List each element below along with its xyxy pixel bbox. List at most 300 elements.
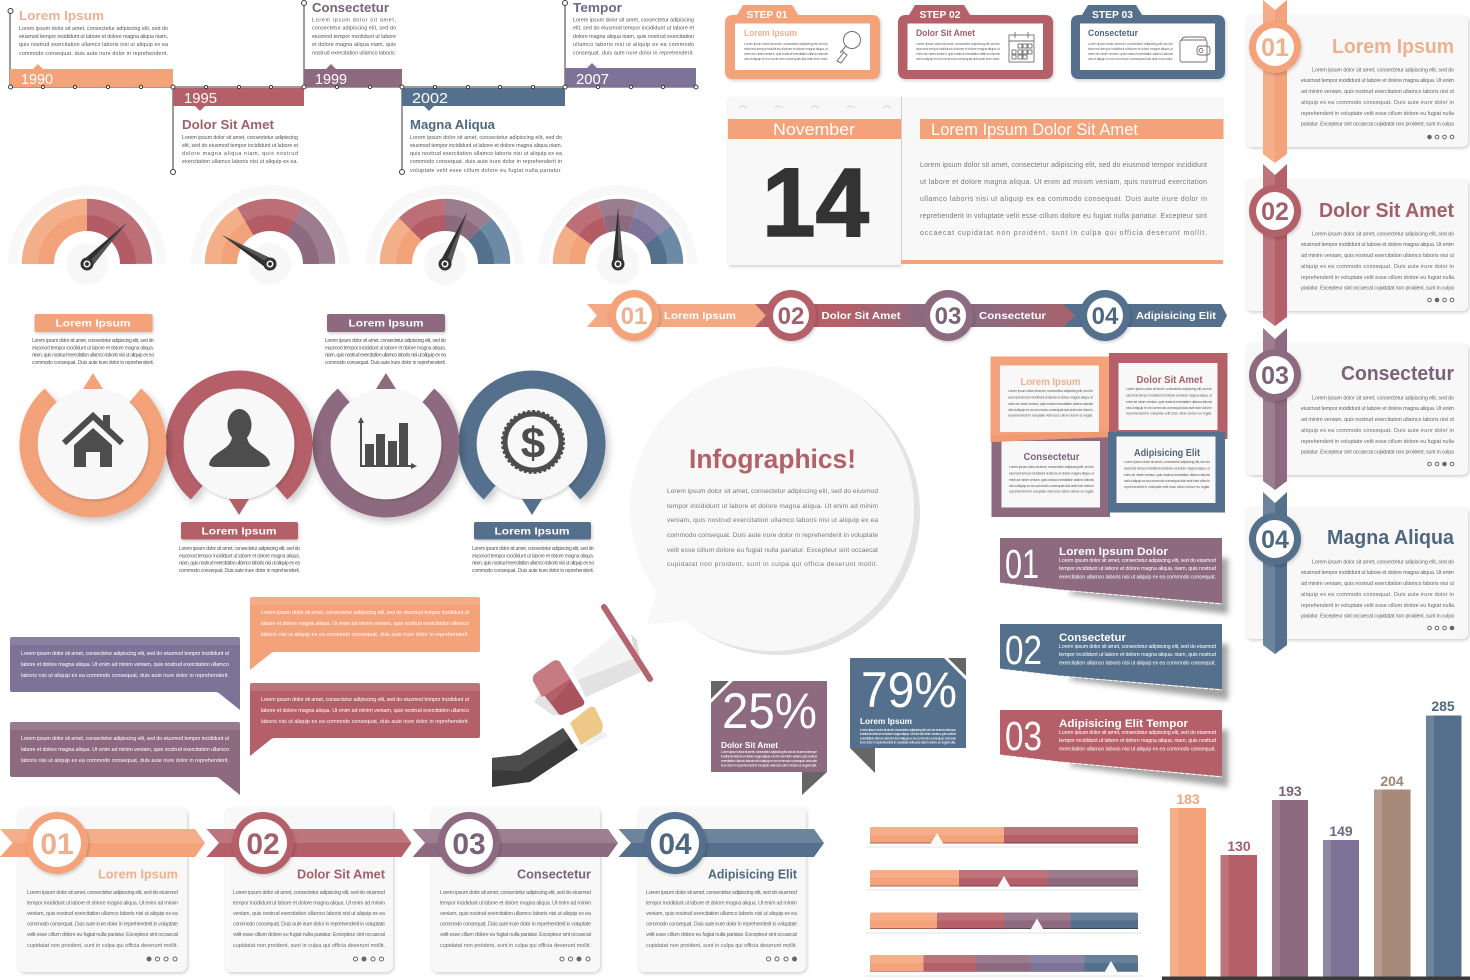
grid box: orange: Lorem ipsum dolor sit amet, consectetur adipiscing elit, sed do xyxy=(1008,389,1093,393)
timeline text: Magna Aliqua: voluptate velit esse cillum dolore eu fugiat nulla pariatur. xyxy=(410,168,562,174)
torn ribbon 02: 02 xyxy=(1005,627,1042,673)
grid box: blue: enim ad minim veniam, quis nostrud exercitation ullamco laboris xyxy=(1124,473,1210,477)
speech box: red: laboris nisi ut aliquip ex ea commodo consequat, duis aute irure dolor in reprehenderit. xyxy=(261,719,469,725)
bottom card 04: commodo consequat. Duis aute irure dolor in reprehenderit in voluptate xyxy=(646,922,797,928)
timeline text: Consectetur: eiusmod tempor incididunt ut labore xyxy=(312,34,396,40)
step labels: Lorem Ipsum xyxy=(664,310,736,322)
vertical card 01: Lorem Ipsum xyxy=(1332,36,1454,58)
speech box: orange: labore et dolore magna aliqua. Ut enim ad minim veniam, quis nostrud exercitation ullamco xyxy=(261,621,469,627)
stat box 25% xyxy=(711,681,827,795)
page dots xyxy=(1428,298,1454,302)
bottom card 01: veniam, quis nostrud exercitation ullamco laboris nisi ut aliquip ex ea xyxy=(27,911,178,917)
gauge 1 xyxy=(13,190,161,285)
stat box 79%: 79% xyxy=(861,662,957,718)
bottom card 04: tempor incididunt ut labore et dolore magna aliqua. Ut enim ad minim xyxy=(646,900,798,906)
icon: dollar coin: $ xyxy=(521,419,545,468)
chart axis xyxy=(1162,976,1470,980)
timeline text: Consectetur: Lorem ipsum dolor sit amet, xyxy=(312,18,396,24)
vertical card 04: 04 xyxy=(1261,526,1289,554)
page dots xyxy=(560,957,590,961)
bottom card 03: commodo consequat. Duis aute irure dolor in reprehenderit in voluptate xyxy=(440,922,591,928)
step card 02: eiusmod tempor incididunt ut labore et dolore magna aliqua. ut xyxy=(916,47,1001,51)
label block: blue: Lorem ipsum dolor sit amet, consectetur adipiscing elit, sed do xyxy=(472,546,594,552)
speech box: red: labore et dolore magna aliqua. Ut enim ad minim veniam, quis nostrud exercitation ullamco xyxy=(261,708,469,714)
speech bubble: commodo consequat. Duis aute irure dolor in reprehenderit in voluptate xyxy=(667,532,878,539)
label block: orange: Lorem Ipsum xyxy=(56,318,130,330)
label block: orange: eiusmod tempor incididunt ut labore et dolore magna aliqua. xyxy=(32,346,154,352)
vertical card 02: eiusmod tempor incididunt ut labore et dolore magna aliqua. Ut enim xyxy=(1301,242,1454,248)
step card 03: nisi ut aliquip ex ea commodo consequat duis aute irure dolor. xyxy=(1088,57,1173,61)
step circle 01 xyxy=(608,290,660,341)
gauge 4 xyxy=(544,190,692,285)
bottom card 03 xyxy=(412,807,618,972)
torn ribbon 03: exercitation ullamco laboris nisi ut aliquip ex ea commodo consequat. xyxy=(1059,746,1216,752)
grid box: red: Lorem ipsum dolor sit amet, consectetur adipiscing elit, sed do xyxy=(1126,387,1212,391)
timeline text: Magna Aliqua: commodo consequat. duis aute irure dolor in reprehenderit in xyxy=(410,159,562,165)
speech box: plum: Lorem ipsum dolor sit amet, consectetur adipiscing elit, sed do eiusmod tempor incididunt ut xyxy=(21,736,229,742)
timeline bar 2007 xyxy=(565,63,696,88)
timeline text: Consectetur: nostrud exercitation ullamco laboris. xyxy=(312,50,396,56)
step card 03: STEP 03 xyxy=(1092,9,1133,21)
label block: plum: eiusmod tempor incididunt ut labore et dolore magna aliqua. xyxy=(325,346,446,352)
speech box: orange: Lorem ipsum dolor sit amet, consectetur adipiscing elit, sed do eiusmod tempor incididunt ut xyxy=(261,610,470,616)
bottom card 03: veniam, quis nostrud exercitation ullamco laboris nisi ut aliquip ex ea xyxy=(440,911,591,917)
vertical card 03: ad minim veniam, quis nostrud exercitation ullamco laboris nisi ut xyxy=(1301,417,1454,423)
bottom card 02: velit esse cillum dolore eu fugiat nulla pariatur. Excepteur sint occaecat xyxy=(233,932,386,938)
megaphone rim xyxy=(604,607,650,679)
vertical card 02: 02 xyxy=(1261,198,1289,226)
label block: red: commodo consequat. Duis aute irure dolor in reprehenderit. xyxy=(179,568,300,574)
grid box: plum: Consectetur xyxy=(1024,452,1080,463)
step circle 03 xyxy=(922,290,974,341)
stat box 79%: Lorem Ipsum xyxy=(860,716,912,726)
bottom card 04: cupidatat non proident, sunt in culpa qui officia deserunt mollit. xyxy=(646,943,797,949)
timeline text: Lorem Ipsum: Lorem Ipsum xyxy=(19,8,104,23)
vertical card 04: pariatur. Excepteur sint occaecat cupidatat non proident, sunt in culpa xyxy=(1301,614,1454,620)
stat box 79%: irure dolor in reprehenderit in voluptate velit esse cillum dolore eu fugiat nulla. xyxy=(860,740,956,744)
bar 204: 204 xyxy=(1380,773,1404,789)
bottom card 01: velit esse cillum dolore eu fugiat nulla pariatur. Excepteur sint occaecat xyxy=(27,932,179,938)
bottom card 01: Lorem Ipsum xyxy=(98,866,178,882)
bottom card 03: 03 xyxy=(452,828,486,861)
grid box: blue: nisi ut aliquip ex ea commodo consequat duis aute irure dolor in xyxy=(1124,479,1210,483)
timeline text: Tempor: Lorem ipsum dolor sit amet, consectetur adipiscing xyxy=(573,18,694,24)
label block: plum: niam, quis nostrud exercitation ullamco laboris nisi ut aliquip ex ea xyxy=(325,352,446,358)
bottom card 01: Lorem ipsum dolor sit amet, consectetur adipiscing elit, sed do eiusmod xyxy=(27,890,178,896)
arm xyxy=(492,728,578,787)
gauge 2 xyxy=(196,190,344,285)
progress bar 1 xyxy=(866,827,1142,848)
bar 204 xyxy=(1374,773,1410,977)
bottom card 04: Lorem ipsum dolor sit amet, consectetur adipiscing elit, sed do eiusmod xyxy=(646,890,797,896)
speech box: red: Lorem ipsum dolor sit amet, consectetur adipiscing elit, sed do eiusmod tempor incididunt ut xyxy=(261,697,470,703)
bar 130 xyxy=(1220,838,1257,977)
progress bar 2 xyxy=(866,870,1142,891)
torn ribbon 03: tempor incididunt ut labore et dolore magna aliqua. niam, quis nostrud xyxy=(1059,738,1216,744)
speech box: red xyxy=(250,683,480,756)
speech box: purple xyxy=(10,637,240,710)
stat box 25%: exercitation ullamco laboris nisi ut aliquip ex ea commodo consequat. duis aute xyxy=(721,759,817,763)
vertical card 03: Consectetur xyxy=(1341,363,1454,385)
vertical card 01: pariatur. Excepteur sint occaecat cupidatat non proident, sunt in culpa xyxy=(1301,122,1454,128)
calendar text panel xyxy=(901,97,1224,264)
stat box 25%: Dolor Sit Amet xyxy=(721,740,778,750)
bottom card 02: 02 xyxy=(246,828,280,861)
gauge 3 xyxy=(371,190,519,285)
step card 02 xyxy=(898,5,1053,79)
label block: red: niam, quis nostrud exercitation ullamco laboris nisi ut aliquip ex ea xyxy=(179,560,300,566)
step card 03: enim ad minim veniam, quis nostrud exercitation ullamco laboris xyxy=(1088,52,1173,56)
grid box: orange: Lorem Ipsum xyxy=(1020,377,1081,388)
timeline text: Tempor: elit, sed do eiusmod tempor incididunt ut labore et xyxy=(573,26,694,32)
timeline text: Lorem Ipsum: Lorem ipsum dolor sit amet, consectetur adipiscing elit, sed do xyxy=(19,26,168,32)
vertical card 04: eiusmod tempor incididunt ut labore et dolore magna aliqua. Ut enim xyxy=(1301,570,1454,576)
bar 183: 183 xyxy=(1176,791,1200,807)
timeline text: Magna Aliqua xyxy=(410,117,562,174)
step circle 04: 04 xyxy=(1092,303,1119,330)
label block: plum: Lorem Ipsum xyxy=(348,318,424,330)
label block: blue: niam, quis nostrud exercitation ullamco laboris nisi ut aliquip ex ea xyxy=(472,560,594,566)
torn ribbon 01: 01 xyxy=(1005,541,1039,587)
bottom card 02: commodo consequat. Duis aute irure dolor in reprehenderit in voluptate xyxy=(233,922,385,928)
grid box: red: eiusmod tempor incididunt ut labore et dolore magna aliqua. ut xyxy=(1126,394,1212,398)
torn ribbon 02: exercitation ullamco laboris nisi ut aliquip ex ea commodo consequat. xyxy=(1059,660,1216,666)
step card 02: enim ad minim veniam, quis nostrud exercitation ullamco laboris xyxy=(916,52,1000,56)
vertical card 04: aliquip ex ea commodo consequat. Duis aute irure dolor in xyxy=(1301,592,1454,598)
bottom card 01: tempor incididunt ut labore et dolore magna aliqua. Ut enim ad minim xyxy=(27,900,179,906)
stat box 25%: irure dolor in reprehenderit in voluptate velit esse cillum dolore eu fugiat nulla. xyxy=(721,764,817,768)
speech bubble: velit esse cillum dolore eu fugiat nulla pariatur. Excepteur sint occaecat xyxy=(667,547,878,554)
grid box: plum xyxy=(992,436,1110,517)
timeline bar 2002: 2002 xyxy=(412,90,448,107)
progress bar 3 xyxy=(866,912,1142,934)
stat box 79% xyxy=(850,658,966,773)
timeline text: Dolor Sit Amet: exercitation ullamco laboris nisi ut aliquip ex ea. xyxy=(182,159,298,165)
vertical card 01: ad minim veniam, quis nostrud exercitation ullamco laboris nisi ut xyxy=(1301,89,1454,95)
vertical card 02 xyxy=(1246,164,1468,326)
bottom card 03: cupidatat non proident, sunt in culpa qui officia deserunt mollit. xyxy=(440,943,591,949)
timeline text: Dolor Sit Amet: Lorem ipsum dolor sit amet, consectetur adipiscing xyxy=(182,135,298,141)
vertical card 02: pariatur. Excepteur sint occaecat cupidatat non proident, sunt in culpa xyxy=(1301,286,1454,292)
bottom card 04: 04 xyxy=(658,828,692,861)
label block: blue: Lorem Ipsum xyxy=(494,526,570,538)
vertical card 04: Magna Aliqua xyxy=(1327,527,1455,549)
step card 01: STEP 01 xyxy=(746,9,788,21)
torn ribbon 01: tempor incididunt ut labore et dolore magna aliqua. niam, quis nostrud xyxy=(1059,566,1216,572)
speech box: purple: laboris nisi ut aliquip ex ea commodo consequat, duis aute irure dolor in reprehenderit. xyxy=(21,673,229,679)
grid box: blue: reprehenderit in voluptate velit esse cillum dolore eu fugiat. xyxy=(1124,485,1210,489)
step card 01: Lorem ipsum dolor sit amet, consectetur adipiscing elit, sed do xyxy=(744,42,828,46)
bottom card 04: velit esse cillum dolore eu fugiat nulla pariatur. Excepteur sint occaecat xyxy=(646,932,798,938)
bottom card 03: velit esse cillum dolore eu fugiat nulla pariatur. Excepteur sint occaecat xyxy=(440,932,592,938)
page dots xyxy=(766,957,796,961)
torn ribbon 01 xyxy=(1000,538,1228,614)
megaphone cone xyxy=(572,632,641,697)
step card 01: nisi ut aliquip ex ea commodo consequat duis aute irure dolor. xyxy=(744,57,828,61)
label block: plum: Lorem ipsum dolor sit amet, consectetur adipiscing elit, sed do xyxy=(325,338,446,344)
torn ribbon 02: tempor incididunt ut labore et dolore magna aliqua. niam, quis nostrud xyxy=(1059,652,1216,658)
timeline text: Tempor: consequat. duis aute irure dolor in reprehenderit. xyxy=(573,50,694,56)
label block: orange: commodo consequat. Duis aute irure dolor in reprehenderit. xyxy=(32,360,154,366)
step labels: Dolor Sit Amet xyxy=(822,310,901,322)
grid box: red: enim ad minim veniam, quis nostrud exercitation ullamco laboris xyxy=(1126,400,1212,404)
timeline text: Dolor Sit Amet: Dolor Sit Amet xyxy=(182,117,275,132)
four box grid xyxy=(990,353,1228,517)
vertical card 01: aliquip ex ea commodo consequat. Duis aute irure dolor in xyxy=(1301,100,1454,106)
grid box: plum: enim ad minim veniam, quis nostrud exercitation ullamco laboris xyxy=(1009,478,1094,482)
timeline text: Lorem Ipsum: eiusmod tempor incididunt ut labore et dolore magna aliqua niam, xyxy=(19,34,168,40)
speech box: orange: laboris nisi ut aliquip ex ea commodo consequat, duis aute irure dolor in reprehenderit. xyxy=(261,632,469,638)
step card 02: nisi ut aliquip ex ea commodo consequat duis aute irure dolor. xyxy=(916,57,1000,61)
bottom card 04: veniam, quis nostrud exercitation ullamco laboris nisi ut aliquip ex ea xyxy=(646,911,797,917)
timeline text: Tempor xyxy=(573,0,694,56)
step labels xyxy=(664,310,1217,322)
step card 03: Consectetur xyxy=(1088,28,1138,38)
torn ribbon 03: Lorem ipsum dolor sit amet, consectetur adipiscing elit, sed do eiusmod xyxy=(1059,730,1216,736)
torn ribbon 01: Lorem ipsum dolor sit amet, consectetur adipiscing elit, sed do eiusmod xyxy=(1059,558,1216,564)
step circle 01: 01 xyxy=(621,303,647,330)
calendar text panel: Lorem ipsum dolor sit amet, consectetur adipiscing elit, sed do eiusmod tempor incididunt xyxy=(920,162,1207,169)
grid box: red: reprehenderit in voluptate velit esse cillum dolore eu fugiat. xyxy=(1126,412,1212,416)
icon: house xyxy=(64,415,122,467)
bottom card 04: Adipisicing Elit xyxy=(708,866,798,882)
torn ribbon 01: exercitation ullamco laboris nisi ut aliquip ex ea commodo consequat. xyxy=(1059,574,1216,580)
calendar text panel: ullamco laboris nisi ut aliquip ex ea commodo consequat. Duis aute irure dolor in xyxy=(920,196,1207,203)
bar 183 xyxy=(1170,791,1206,977)
speech box: plum xyxy=(10,722,240,795)
icon: wallet xyxy=(1180,37,1210,62)
vertical card 04: ad minim veniam, quis nostrud exercitation ullamco laboris nisi ut xyxy=(1301,581,1454,587)
timeline text: Magna Aliqua: Magna Aliqua xyxy=(410,117,496,132)
speech bubble xyxy=(630,367,920,655)
circle process 3 ring xyxy=(322,373,451,508)
label block: orange xyxy=(32,314,154,366)
step circle 02 xyxy=(766,290,816,341)
speech bubble: tempor incididunt ut labore et dolore magna aliqua. Ut enim ad minim xyxy=(667,503,878,510)
calendar panel: 14 xyxy=(762,148,869,257)
timeline text: Dolor Sit Amet xyxy=(182,117,298,165)
icon: megaphone with hand xyxy=(492,607,650,787)
stat box 79%: Lorem ipsum dolor sit amet, consectetur adipiscing elit, sed do eiusmod tempor xyxy=(860,728,957,732)
calendar text panel: ut labore et dolore magna aliqua. Ut enim ad minim veniam, quis nostrud exercitation xyxy=(920,179,1207,186)
step card 03 xyxy=(1071,5,1225,79)
grid box: plum: eiusmod tempor incididunt ut labore et dolore magna aliqua. ut xyxy=(1009,472,1094,476)
bar 149: 149 xyxy=(1329,823,1353,839)
label block: red: Lorem ipsum dolor sit amet, consectetur adipiscing elit, sed do xyxy=(179,546,300,552)
bar 130: 130 xyxy=(1227,838,1251,854)
timeline text: Magna Aliqua: Lorem ipsum dolor sit amet, consectetur adipiscing elit, sed do xyxy=(410,135,562,141)
torn ribbon 02 xyxy=(1000,624,1228,700)
calendar panel xyxy=(728,97,901,265)
timeline bar 1999: 1999 xyxy=(315,71,347,88)
timeline bar 2007: 2007 xyxy=(576,71,609,88)
bottom card 04 xyxy=(618,807,824,972)
torn ribbon 03: 03 xyxy=(1005,713,1042,759)
grid box: orange: enim ad minim veniam, quis nostrud exercitation ullamco laboris xyxy=(1008,402,1093,406)
page dots xyxy=(1428,462,1454,466)
grid box: blue: Lorem ipsum dolor sit amet, consectetur adipiscing elit, sed do xyxy=(1124,460,1210,464)
vertical card 01: 01 xyxy=(1261,34,1289,62)
calendar panel: November xyxy=(773,120,855,139)
grid box: plum: nisi ut aliquip ex ea commodo consequat duis aute irure dolor in xyxy=(1009,484,1094,488)
label block: blue: eiusmod tempor incididunt ut labore et dolore magna aliqua. xyxy=(472,554,594,560)
bottom card 02: tempor incididunt ut labore et dolore magna aliqua. Ut enim ad minim xyxy=(233,900,386,906)
timeline text: Magna Aliqua: quis nostrud exercitation ullamco laboris nisi ut aliquip ex ea xyxy=(410,151,562,157)
stat box 25%: incididunt ut labore et dolore magna aliqua. Ut enim ad minim veniam, quis nostrud xyxy=(721,754,817,758)
vertical card 03: Lorem ipsum dolor sit amet, consectetur adipiscing elit, sed do xyxy=(1312,396,1454,402)
timeline text: Consectetur: Consectetur xyxy=(312,0,389,15)
icon: bar chart xyxy=(358,417,417,469)
vertical card 02: Lorem ipsum dolor sit amet, consectetur adipiscing elit, sed do xyxy=(1312,232,1454,238)
grid box: plum: Lorem ipsum dolor sit amet, consectetur adipiscing elit, sed do xyxy=(1009,465,1094,469)
step card 01: Lorem Ipsum xyxy=(744,28,797,38)
vertical card 03: reprehenderit in voluptate velit esse cillum dolore eu fugiat nulla xyxy=(1301,439,1454,445)
bottom card 02: veniam, quis nostrud exercitation ullamco laboris nisi ut aliquip ex ea xyxy=(233,911,385,917)
vertical card 02: aliquip ex ea commodo consequat. Duis aute irure dolor in xyxy=(1301,264,1454,270)
label block: orange: niam, quis nostrud exercitation ullamco laboris nisi ut aliquip ex ea xyxy=(32,352,154,358)
timeline text: Lorem Ipsum: commodo consequat. duis aute irure dolor in reprehenderit. xyxy=(19,51,168,57)
step labels: Consectetur xyxy=(979,310,1046,322)
timeline xyxy=(8,0,698,174)
timeline bar 1990 xyxy=(10,64,173,88)
timeline text: Dolor Sit Amet: dolore magna aliqua niam, quis nostrud xyxy=(182,151,298,157)
torn ribbon 02: Lorem ipsum dolor sit amet, consectetur adipiscing elit, sed do eiusmod xyxy=(1059,644,1216,650)
timeline text: Tempor: Tempor xyxy=(573,0,622,15)
bar 285 xyxy=(1426,698,1462,977)
bottom card 02: Dolor Sit Amet xyxy=(297,866,386,882)
timeline bar 1995 xyxy=(173,88,304,111)
step circle 02: 02 xyxy=(778,303,804,330)
timeline text: Lorem Ipsum: quis nostrud exercitation ullamco laboris nisi ut aliquip ex ea xyxy=(19,42,168,48)
calendar text panel: occaecat cupidatat non proident, sunt in culpa qui officia deserunt mollit. xyxy=(920,230,1207,237)
grid box: red: Dolor Sit Amet xyxy=(1136,375,1203,386)
label block: red xyxy=(179,522,300,574)
label block: plum: commodo consequat. Duis aute irure dolor in reprehenderit. xyxy=(325,360,446,366)
speech bubble: Lorem ipsum dolor sit amet, consectetur adipiscing elit, sed do eiusmod xyxy=(667,488,878,495)
page dots xyxy=(1428,135,1454,139)
timeline text: Tempor: dolore magna aliqua niam, quis nostrud exercitation xyxy=(573,34,694,40)
torn ribbon 03: Adipisicing Elit Tempor xyxy=(1059,718,1189,730)
grid box: orange xyxy=(990,356,1109,442)
grid box: orange: reprehenderit in voluptate velit esse cillum dolore eu fugiat. xyxy=(1008,414,1093,418)
torn ribbon 02: Consectetur xyxy=(1059,632,1127,644)
timeline nodes xyxy=(8,0,698,174)
bar 193 xyxy=(1272,783,1308,977)
bottom card 01: cupidatat non proident, sunt in culpa qui officia deserunt mollit. xyxy=(27,943,178,949)
vertical card 02: reprehenderit in voluptate velit esse cillum dolore eu fugiat nulla xyxy=(1301,275,1454,281)
speech bubble: veniam, quis nostrud exercitation ullamco laboris nisi ut aliquip ex ea xyxy=(667,517,878,524)
stat box 79%: exercitation ullamco laboris nisi ut aliquip ex ea commodo consequat. duis aute xyxy=(860,736,956,740)
step labels: Adipisicing Elit xyxy=(1136,310,1217,322)
bar 149 xyxy=(1323,823,1359,977)
vertical card 02: ad minim veniam, quis nostrud exercitation ullamco laboris nisi ut xyxy=(1301,253,1454,259)
bottom card 03: tempor incididunt ut labore et dolore magna aliqua. Ut enim ad minim xyxy=(440,900,592,906)
grid box: blue: Adipisicing Elit xyxy=(1134,448,1201,459)
stat box 25%: 25% xyxy=(722,683,817,739)
speech bubble: Infographics! xyxy=(689,444,856,474)
icon: person xyxy=(209,409,270,467)
label block: plum xyxy=(325,314,446,366)
bottom card 02: cupidatat non proident, sunt in culpa qui officia deserunt mollit. xyxy=(233,943,385,949)
grid box: red: nisi ut aliquip ex ea commodo consequat duis aute irure dolor in xyxy=(1126,406,1212,410)
stat box 79%: incididunt ut labore et dolore magna aliqua. Ut enim ad minim veniam, quis nostrud xyxy=(860,732,956,736)
circle process 2 ring xyxy=(174,380,304,515)
speech box: purple: labore et dolore magna aliqua. Ut enim ad minim veniam, quis nostrud exercitation ullamco xyxy=(21,662,229,668)
bar 285: 285 xyxy=(1431,698,1455,714)
timeline bar 1990: 1990 xyxy=(21,71,53,88)
bottom card 01: 01 xyxy=(40,828,74,861)
timeline text: Consectetur xyxy=(312,0,396,56)
timeline bar 2002 xyxy=(402,88,565,111)
vertical card 04: reprehenderit in voluptate velit esse cillum dolore eu fugiat nulla xyxy=(1301,603,1454,609)
speech box: plum: laboris nisi ut aliquip ex ea commodo consequat, duis aute irure dolor in reprehenderit. xyxy=(21,758,229,764)
page dots xyxy=(1428,626,1454,630)
vertical card 03: eiusmod tempor incididunt ut labore et dolore magna aliqua. Ut enim xyxy=(1301,406,1454,412)
label block: red: Lorem Ipsum xyxy=(202,526,276,538)
step card 02: STEP 02 xyxy=(920,9,961,21)
calendar text panel: Lorem Ipsum Dolor Sit Amet xyxy=(931,120,1138,139)
grid box: blue: eiusmod tempor incididunt ut labore et dolore magna aliqua. ut xyxy=(1124,466,1210,470)
bottom card 01: commodo consequat. Duis aute irure dolor in reprehenderit in voluptate xyxy=(27,922,178,928)
vertical card 03: aliquip ex ea commodo consequat. Duis aute irure dolor in xyxy=(1301,428,1454,434)
vertical card 03: pariatur. Excepteur sint occaecat cupidatat non proident, sunt in culpa xyxy=(1301,450,1454,456)
step circle 04 xyxy=(1080,290,1130,341)
page dots xyxy=(354,957,384,961)
step card 01: enim ad minim veniam, quis nostrud exercitation ullamco laboris xyxy=(744,52,828,56)
icon: magnifier xyxy=(837,32,860,63)
step card 01 xyxy=(725,5,880,79)
bottom card 02: Lorem ipsum dolor sit amet, consectetur adipiscing elit, sed do eiusmod xyxy=(233,890,385,896)
speech box: plum: labore et dolore magna aliqua. Ut enim ad minim veniam, quis nostrud exercitation ullamco xyxy=(21,747,229,753)
timeline bar 1999 xyxy=(304,64,402,88)
torn ribbon 03 xyxy=(1000,710,1228,787)
vertical card 02: Dolor Sit Amet xyxy=(1319,200,1454,222)
timeline text: Dolor Sit Amet: elit, sed do eiusmod tempor incididunt ut labore et xyxy=(182,143,298,149)
step card 01: eiusmod tempor incididunt ut labore et dolore magna aliqua. ut xyxy=(744,47,829,51)
progress bar 4 xyxy=(866,955,1142,977)
hand xyxy=(583,706,608,747)
bottom card 01 xyxy=(0,807,205,972)
speech bubble: cupidatat non proident, sunt in culpa qui officia deserunt mollit. xyxy=(667,561,878,568)
circle process 4 ring xyxy=(468,380,596,515)
circle process 1 ring xyxy=(28,373,157,508)
icon: calendar xyxy=(1009,32,1034,62)
vertical card 01: Lorem ipsum dolor sit amet, consectetur adipiscing elit, sed do xyxy=(1312,68,1454,74)
vertical card 03: 03 xyxy=(1261,362,1289,390)
arrow process xyxy=(587,290,1227,341)
timeline bar 1995: 1995 xyxy=(184,90,217,107)
stat box 25%: Lorem ipsum dolor sit amet, consectetur adipiscing elit, sed do eiusmod tempor xyxy=(721,750,818,754)
step card 02: Dolor Sit Amet xyxy=(916,28,975,38)
grid box: orange: eiusmod tempor incididunt ut labore et dolore magna aliqua. ut xyxy=(1008,396,1093,400)
label block: blue: commodo consequat. Duis aute irure dolor in reprehenderit. xyxy=(472,568,594,574)
bottom card 03: Consectetur xyxy=(517,866,591,882)
bottom card 03: Lorem ipsum dolor sit amet, consectetur adipiscing elit, sed do eiusmod xyxy=(440,890,591,896)
grid box: red xyxy=(1109,353,1228,439)
bar 193: 193 xyxy=(1278,783,1302,799)
torn ribbon 01: Lorem Ipsum Dolor xyxy=(1059,546,1169,558)
megaphone back xyxy=(533,660,584,715)
timeline text: Consectetur: consectetur adipiscing elit, sed do xyxy=(312,26,396,32)
calendar text panel: reprehenderit in voluptate velit esse cillum dolore eu fugiat nulla pariatur. Excepteur sint xyxy=(920,213,1207,220)
timeline text: Magna Aliqua: eiusmod tempor incididunt ut labore et dolore magna aliqua niam, xyxy=(410,143,562,149)
vertical card 04 xyxy=(1246,492,1468,654)
vertical card 01: reprehenderit in voluptate velit esse cillum dolore eu fugiat nulla xyxy=(1301,111,1454,117)
vertical card 04: Lorem ipsum dolor sit amet, consectetur adipiscing elit, sed do xyxy=(1312,560,1454,566)
vertical card 01: eiusmod tempor incididunt ut labore et dolore magna aliqua. Ut enim xyxy=(1301,78,1454,84)
label block: red: eiusmod tempor incididunt ut labore et dolore magna aliqua. xyxy=(179,554,300,560)
label block: blue xyxy=(472,522,594,574)
